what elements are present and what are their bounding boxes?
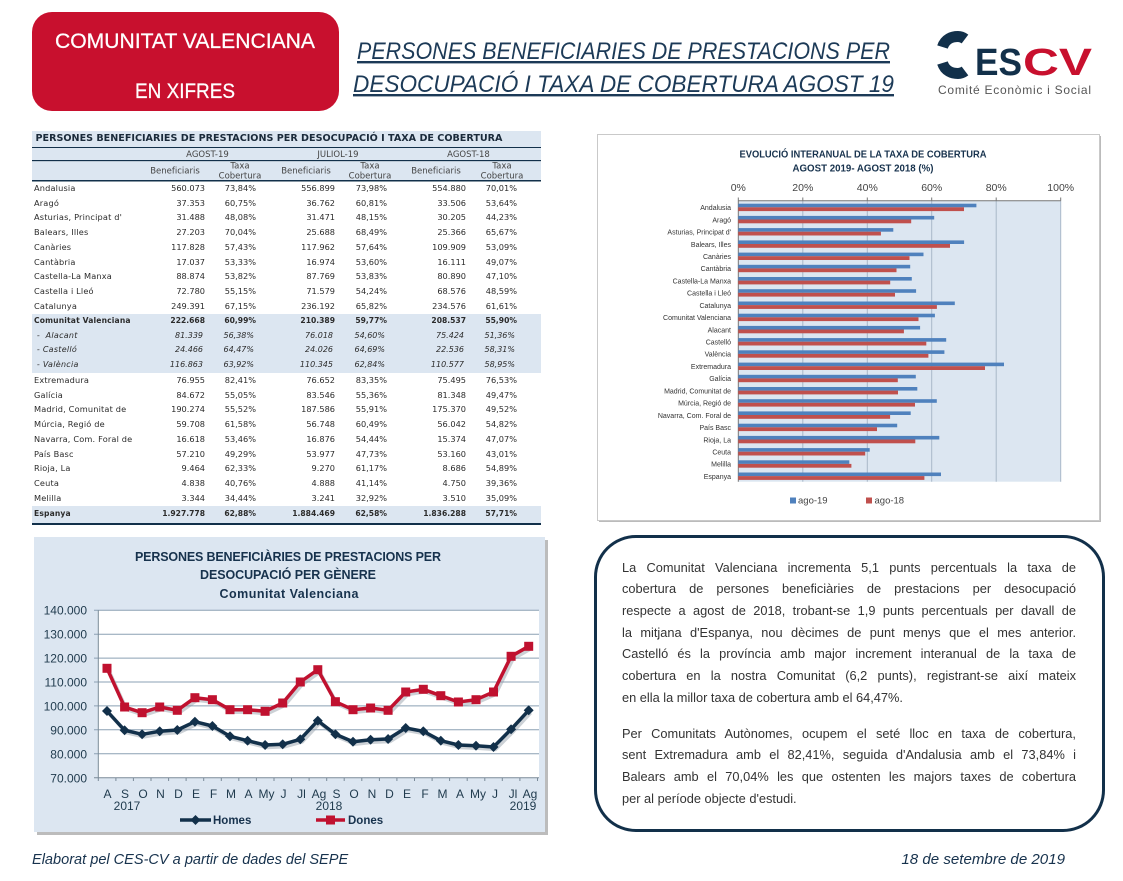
month labels: N: [368, 787, 376, 801]
data table: beneficiaries and coverage rate by region: 208.537: [431, 316, 466, 325]
data table: beneficiaries and coverage rate by region: País Basc: [34, 449, 74, 459]
region labels: Canàries: [703, 254, 731, 261]
data table: beneficiaries and coverage rate by region: 54,44%: [356, 434, 387, 444]
data table: beneficiaries and coverage rate by region: 53.977: [306, 449, 335, 459]
table column headers: [32, 148, 541, 182]
region labels: Rioja, La: [703, 437, 731, 444]
line shadows: [109, 649, 531, 750]
data table: beneficiaries and coverage rate by region: 72.780: [176, 286, 205, 296]
data table: beneficiaries and coverage rate by region: 117.962: [301, 242, 335, 252]
data table: beneficiaries and coverage rate by region: 60,75%: [225, 198, 256, 208]
data table: beneficiaries and coverage rate by region: 9.464: [182, 463, 205, 473]
data table: beneficiaries and coverage rate by region: 36.762: [306, 198, 335, 208]
data table: beneficiaries and coverage rate by region: 53,33%: [225, 257, 256, 267]
data table: beneficiaries and coverage rate by region: 49,52%: [486, 404, 517, 414]
data table: beneficiaries and coverage rate by region: 249.391: [171, 301, 205, 311]
commentary paragraph 2: Per Comunitats Autònomes, ocupem el seté lloc en taxa de cobertura,: [622, 726, 1076, 740]
data table: beneficiaries and coverage rate by region: 76,53%: [486, 375, 517, 385]
region labels: Galícia: [709, 376, 731, 383]
data table: beneficiaries and coverage rate by region: 109.909: [432, 242, 466, 252]
region labels: Madrid, Comunitat de: [664, 388, 731, 395]
data table: beneficiaries and coverage rate by region: 83.546: [306, 390, 335, 400]
bar chart legend: [790, 496, 904, 506]
table column headers: Cobertura: [219, 172, 261, 182]
data table: beneficiaries and coverage rate by region: 80.890: [437, 271, 466, 281]
data table: beneficiaries and coverage rate by region: [32, 183, 541, 525]
commentary paragraph 1: Castelló és la província amb major increment interanual de la taxa de: [622, 646, 1076, 661]
line chart title: PERSONES BENEFICIÀRIES DE PRESTACIONS PER: [135, 549, 441, 564]
header badge: Comunitat Valenciana en xifres: EN XIFRES: [135, 80, 235, 103]
data table: beneficiaries and coverage rate by region: 55,05%: [225, 390, 256, 400]
data table: beneficiaries and coverage rate by region: 187.586: [301, 404, 335, 414]
data table: beneficiaries and coverage rate by region: 68,49%: [356, 227, 387, 237]
data table: beneficiaries and coverage rate by region: 55,91%: [356, 404, 387, 414]
region labels: Ceuta: [712, 450, 731, 456]
percent axis labels: 100%: [1047, 182, 1074, 194]
line chart legend: [180, 815, 383, 827]
line chart title: DESOCUPACIÓ PER GÈNERE: [200, 567, 376, 582]
data table: beneficiaries and coverage rate by region: 9.270: [312, 463, 335, 473]
data table: beneficiaries and coverage rate by region: 59,77%: [355, 316, 387, 325]
month labels: J: [280, 787, 286, 801]
data table: beneficiaries and coverage rate by region: 190.274: [171, 404, 205, 414]
data table: beneficiaries and coverage rate by region: 31.471: [306, 212, 335, 222]
data table: beneficiaries and coverage rate by region: Asturias, Principat d': [34, 212, 122, 222]
data table: beneficiaries and coverage rate by region: 55,90%: [485, 316, 517, 325]
data table: beneficiaries and coverage rate by region: 53,64%: [486, 198, 517, 208]
data table: beneficiaries and coverage rate by region: 75.424: [436, 331, 464, 340]
table column headers: Beneficiaris: [281, 166, 331, 176]
data table: beneficiaries and coverage rate by region: 55,36%: [356, 390, 387, 400]
data table: beneficiaries and coverage rate by region: 24.466: [175, 345, 203, 354]
data table: beneficiaries and coverage rate by region: Múrcia, Regió de: [34, 419, 105, 429]
data table: beneficiaries and coverage rate by region: 16.974: [306, 257, 335, 267]
data table: beneficiaries and coverage rate by region: 62,33%: [225, 463, 256, 473]
data table: beneficiaries and coverage rate by region: 88.874: [176, 271, 205, 281]
month labels: Ag: [312, 787, 326, 801]
month labels: O: [138, 787, 148, 801]
data table: beneficiaries and coverage rate by region: Aragó: [34, 198, 59, 208]
data table: beneficiaries and coverage rate by region: 70,04%: [225, 227, 256, 237]
y axis labels: 130.000: [44, 628, 87, 642]
data table: beneficiaries and coverage rate by region: Castella-La Manxa: [34, 271, 112, 281]
data table: beneficiaries and coverage rate by region: 54,82%: [486, 419, 517, 429]
data table: beneficiaries and coverage rate by region: 48,15%: [356, 212, 387, 222]
percent axis labels: 40%: [857, 182, 878, 194]
commentary paragraph 2: sent Extremadura amb el 82,41%, seguida d'Andalusia amb el 73,84% i: [622, 747, 1076, 762]
data table: beneficiaries and coverage rate by region: 53,46%: [225, 434, 256, 444]
data table: beneficiaries and coverage rate by region: 47,10%: [486, 271, 517, 281]
data table: beneficiaries and coverage rate by region: Navarra, Com. Foral de: [34, 434, 132, 444]
table title band: [32, 131, 541, 148]
data table: beneficiaries and coverage rate by region: Comunitat Valenciana: [34, 316, 131, 325]
data table: beneficiaries and coverage rate by region: 54,24%: [356, 286, 387, 296]
table column headers: Cobertura: [481, 172, 523, 182]
panel: bar chart of coverage rate, Aug 2019 vs Aug 2018: [597, 134, 1101, 522]
data table: beneficiaries and coverage rate by region: 116.863: [170, 360, 203, 369]
month labels: A: [103, 787, 112, 801]
month labels: Jl: [297, 787, 306, 801]
table column headers: JULIOL-19: [316, 150, 359, 160]
data table: beneficiaries and coverage rate by region: 37.353: [176, 198, 205, 208]
data table: beneficiaries and coverage rate by region: Castella i Lleó: [34, 286, 94, 296]
y axis labels: 90.000: [50, 724, 87, 738]
data table: beneficiaries and coverage rate by region: 16.618: [176, 434, 205, 444]
data table: beneficiaries and coverage rate by region: Melilla: [34, 493, 61, 503]
data table: beneficiaries and coverage rate by region: Ceuta: [34, 478, 59, 488]
data table: beneficiaries and coverage rate by region: 3.344: [182, 493, 205, 503]
region labels: Cantàbria: [701, 266, 731, 273]
percent axis labels: 20%: [792, 182, 813, 194]
region labels: Andalusia: [700, 205, 731, 212]
percent axis labels: [731, 182, 1074, 194]
data table: beneficiaries and coverage rate by region: 76.018: [305, 331, 333, 340]
data table: beneficiaries and coverage rate by region: 33.506: [437, 198, 466, 208]
percent axis labels: 0%: [731, 182, 746, 194]
data table: beneficiaries and coverage rate by region: 4.838: [182, 478, 205, 488]
data table: beneficiaries and coverage rate by region: 57,43%: [225, 242, 256, 252]
table column headers: Beneficiaris: [411, 166, 461, 176]
data table: beneficiaries and coverage rate by region: 76.955: [176, 375, 205, 385]
region labels: Castelló: [706, 340, 731, 346]
region labels: Catalunya: [699, 303, 731, 310]
region labels: Balears, Illes: [691, 242, 731, 249]
month labels: O: [349, 787, 359, 801]
data table: beneficiaries and coverage rate by region: 57,64%: [356, 242, 387, 252]
data table: beneficiaries and coverage rate by region: 556.899: [301, 183, 335, 193]
commentary paragraph 1: [622, 560, 1076, 705]
data table: beneficiaries and coverage rate by region: 117.828: [171, 242, 205, 252]
commentary paragraph 2: [622, 726, 1076, 806]
bars ago-19: [738, 204, 1004, 476]
data table: beneficiaries and coverage rate by region: 554.880: [432, 183, 466, 193]
data table: beneficiaries and coverage rate by region: 82,41%: [225, 375, 256, 385]
header badge: Comunitat Valenciana en xifres: [32, 12, 339, 111]
data table: beneficiaries and coverage rate by region: Espanya: [34, 509, 71, 518]
data table: beneficiaries and coverage rate by region: - València: [37, 360, 79, 369]
data table: beneficiaries and coverage rate by region: Balears, Illes: [34, 227, 88, 237]
y axis labels: 100.000: [44, 700, 87, 714]
data table: beneficiaries and coverage rate by region: 222.668: [170, 316, 205, 325]
data table: beneficiaries and coverage rate by region: 34,44%: [225, 493, 256, 503]
plot area and gridlines: [94, 610, 539, 781]
region labels: País Basc: [699, 425, 731, 432]
data table: beneficiaries and coverage rate by region: 53,60%: [356, 257, 387, 267]
month labels: My: [470, 787, 486, 801]
region labels: Navarra, Com. Foral de: [658, 413, 731, 420]
commentary paragraph 1: cobertura de persones beneficiàries de prestacions per desocupació: [622, 581, 1076, 596]
table title band: PERSONES BENEFICIARIES DE PRESTACIONS PER DESOCUPACIÓ I TAXA DE COBERTURA: [36, 133, 502, 144]
data table: beneficiaries and coverage rate by region: 61,58%: [225, 419, 256, 429]
data table: beneficiaries and coverage rate by region: 48,59%: [486, 286, 517, 296]
data table: beneficiaries and coverage rate by region: 17.037: [176, 257, 205, 267]
region labels: Extremadura: [691, 364, 731, 371]
month labels: F: [421, 787, 429, 801]
panel: line chart of beneficiaries by gender: [34, 537, 548, 835]
bars ago-18: [738, 207, 985, 480]
data table: beneficiaries and coverage rate by region: 15.374: [437, 434, 466, 444]
month labels: Ag: [523, 787, 537, 801]
data table: beneficiaries and coverage rate by region: 83,35%: [356, 375, 387, 385]
data table: beneficiaries and coverage rate by region: 60,49%: [356, 419, 387, 429]
commentary paragraph 1: cobertura en la nostra Comunitat (6,2 punts), registrant-se així mateix: [622, 668, 1076, 683]
data table: beneficiaries and coverage rate by region: 55,15%: [225, 286, 256, 296]
month labels: E: [403, 787, 411, 801]
table column headers: Taxa: [491, 162, 512, 172]
month labels: A: [456, 787, 464, 801]
region labels: Castella i Lleó: [687, 291, 731, 298]
region labels: Alacant: [708, 327, 731, 334]
data table: beneficiaries and coverage rate by region: 61,17%: [356, 463, 387, 473]
data table: beneficiaries and coverage rate by region: 40,76%: [225, 478, 256, 488]
month labels: S: [121, 787, 129, 801]
data table: beneficiaries and coverage rate by region: 110.345: [300, 360, 333, 369]
logo: CES CV: [937, 31, 1093, 97]
y axis labels: 110.000: [44, 676, 87, 690]
data table: beneficiaries and coverage rate by region: 55,52%: [225, 404, 256, 414]
region labels: València: [705, 352, 731, 359]
data table: beneficiaries and coverage rate by region: 1.927.778: [162, 509, 205, 518]
y axis labels: [44, 604, 87, 786]
bar chart legend: ago-18: [874, 496, 904, 506]
commentary paragraph 2: per al període objecte d'estudi.: [622, 791, 797, 806]
month labels: F: [210, 787, 217, 801]
table column headers: AGOST-19: [186, 150, 229, 160]
data table: beneficiaries and coverage rate by region: 175.370: [432, 404, 466, 414]
data table: beneficiaries and coverage rate by region: 44,23%: [486, 212, 517, 222]
data table: beneficiaries and coverage rate by region: 560.073: [171, 183, 205, 193]
month labels: J: [492, 787, 498, 801]
data table: beneficiaries and coverage rate by region: - Castelló: [37, 345, 77, 354]
header badge: Comunitat Valenciana en xifres: COMUNITAT VALENCIANA: [55, 30, 315, 53]
data table: beneficiaries and coverage rate by region: 62,84%: [354, 360, 385, 369]
footer: source: Elaborat pel CES-CV a partir de dades del SEPE: [32, 852, 348, 868]
logo: CES CV: ES: [975, 42, 1022, 84]
y axis labels: 120.000: [44, 652, 87, 666]
title: [353, 38, 894, 98]
data table: beneficiaries and coverage rate by region: 63,92%: [223, 360, 254, 369]
percent axis labels: 60%: [921, 182, 942, 194]
month labels: D: [174, 787, 183, 801]
data table: beneficiaries and coverage rate by region: Galícia: [34, 390, 63, 400]
data table: beneficiaries and coverage rate by region: 60,99%: [224, 316, 256, 325]
y axis labels: 140.000: [44, 604, 87, 618]
month labels: N: [156, 787, 165, 801]
line chart legend: Dones: [348, 815, 383, 827]
data table: beneficiaries and coverage rate by region: 61,61%: [486, 301, 517, 311]
data table: beneficiaries and coverage rate by region: 110.577: [431, 360, 464, 369]
data table: beneficiaries and coverage rate by region: 49,07%: [486, 257, 517, 267]
data table: beneficiaries and coverage rate by region: 24.026: [305, 345, 333, 354]
data table: beneficiaries and coverage rate by region: Cantàbria: [34, 257, 76, 267]
data table: beneficiaries and coverage rate by region: 53,82%: [225, 271, 256, 281]
commentary paragraph 2: Balears amb el 70,04% les que ostenten les majors taxes de cobertura: [622, 769, 1076, 784]
region labels: Castella-La Manxa: [673, 278, 731, 285]
line chart legend: Homes: [213, 815, 251, 827]
table column headers: Beneficiaris: [150, 166, 200, 176]
data table: beneficiaries and coverage rate by region: 62,88%: [224, 509, 256, 518]
table column headers: AGOST-18: [447, 150, 490, 160]
region labels: Múrcia, Regió de: [678, 401, 731, 408]
month labels: M: [226, 787, 236, 801]
month labels: My: [258, 787, 274, 801]
data table: beneficiaries and coverage rate by region: 56.042: [437, 419, 466, 429]
data table: beneficiaries and coverage rate by region: 49,29%: [225, 449, 256, 459]
commentary paragraph 1: La Comunitat Valenciana incrementa 5,1 punts percentuals la taxa de: [622, 560, 1076, 574]
data table: beneficiaries and coverage rate by region: 53,09%: [486, 242, 517, 252]
data table: beneficiaries and coverage rate by region: 53.160: [437, 449, 466, 459]
bar chart title: EVOLUCIÓ INTERANUAL DE LA TAXA DE COBERTURA: [740, 148, 987, 160]
commentary paragraph 1: la mitjana d'Espanya, nou dècimes de punt menys que el mes anterior.: [622, 625, 1076, 640]
data table: beneficiaries and coverage rate by region: 57,71%: [485, 509, 517, 518]
panel: commentary text: [594, 535, 1105, 832]
data table: beneficiaries and coverage rate by region: 234.576: [432, 301, 466, 311]
data table: beneficiaries and coverage rate by region: 87.769: [306, 271, 335, 281]
data table: beneficiaries and coverage rate by region: 25.366: [437, 227, 466, 237]
data table: beneficiaries and coverage rate by region: 84.672: [176, 390, 205, 400]
data table: beneficiaries and coverage rate by region: 41,14%: [356, 478, 387, 488]
logo: CES CV: Comité Econòmic i Social: [938, 83, 1091, 97]
data table: beneficiaries and coverage rate by region: 65,67%: [486, 227, 517, 237]
table column headers: Taxa: [229, 162, 250, 172]
logo: CES CV: CV: [1023, 42, 1093, 84]
month labels: 2018: [316, 799, 343, 813]
data table: beneficiaries and coverage rate by region: 47,07%: [486, 434, 517, 444]
data table: beneficiaries and coverage rate by region: Canàries: [34, 242, 71, 252]
percent axis labels: 80%: [986, 182, 1007, 194]
data table: beneficiaries and coverage rate by region: 81.348: [437, 390, 466, 400]
data table: beneficiaries and coverage rate by region: Madrid, Comunitat de: [34, 404, 126, 414]
data table: beneficiaries and coverage rate by region: 210.389: [300, 316, 335, 325]
data table: beneficiaries and coverage rate by region: 64,47%: [223, 345, 254, 354]
data table: beneficiaries and coverage rate by region: 30.205: [437, 212, 466, 222]
data table: beneficiaries and coverage rate by region: Extremadura: [34, 375, 89, 385]
y axis labels: 70.000: [50, 772, 87, 786]
commentary paragraph 1: respecte a agost de 2018, trobant-se 1,9 punts percentuals per davall de: [622, 603, 1076, 618]
data table: beneficiaries and coverage rate by region: 49,47%: [486, 390, 517, 400]
data table: beneficiaries and coverage rate by region: 236.192: [301, 301, 335, 311]
data table: beneficiaries and coverage rate by region: 47,73%: [356, 449, 387, 459]
data table: beneficiaries and coverage rate by region: 1.884.469: [292, 509, 335, 518]
y axis labels: 80.000: [50, 748, 87, 762]
data table: beneficiaries and coverage rate by region: 54,60%: [354, 331, 385, 340]
region labels: Espanya: [704, 474, 731, 481]
data table: beneficiaries and coverage rate by region: 76.652: [306, 375, 335, 385]
month labels: E: [192, 787, 200, 801]
data table: beneficiaries and coverage rate by region: 43,01%: [486, 449, 517, 459]
data table: beneficiaries and coverage rate by region: 4.888: [312, 478, 335, 488]
month labels: 2017: [114, 799, 141, 813]
data table: beneficiaries and coverage rate by region: 3.510: [443, 493, 466, 503]
table column headers: Taxa: [359, 162, 380, 172]
commentary paragraph 1: en ella la millor taxa de cobertura amb el 64,47%.: [622, 690, 903, 705]
data table: beneficiaries and coverage rate by region: 73,84%: [225, 183, 256, 193]
line: Homes: [107, 710, 529, 747]
data table: beneficiaries and coverage rate by region: 68.576: [437, 286, 466, 296]
data table: beneficiaries and coverage rate by region: Rioja, La: [34, 463, 71, 473]
bar chart title: [740, 148, 987, 174]
data table: beneficiaries and coverage rate by region: 16.111: [437, 257, 466, 267]
data table: beneficiaries and coverage rate by region: 3.241: [312, 493, 335, 503]
month labels: M: [438, 787, 448, 801]
bar chart title: AGOST 2019- AGOST 2018 (%): [792, 162, 934, 174]
data table: beneficiaries and coverage rate by region: 22.536: [436, 345, 464, 354]
data table: beneficiaries and coverage rate by region: Andalusia: [34, 183, 76, 193]
region labels: Asturias, Principat d': [667, 230, 731, 236]
data table: beneficiaries and coverage rate by region: 32,92%: [356, 493, 387, 503]
month labels: A: [244, 787, 253, 801]
data table: beneficiaries and coverage rate by region: 31.488: [176, 212, 205, 222]
region labels: Aragó: [712, 217, 731, 224]
data table: beneficiaries and coverage rate by region: 39,36%: [486, 478, 517, 488]
data table: beneficiaries and coverage rate by region: 64,69%: [354, 345, 385, 354]
line chart title: Comunitat Valenciana: [220, 587, 360, 601]
data table: beneficiaries and coverage rate by region: 53,83%: [356, 271, 387, 281]
data table: beneficiaries and coverage rate by region: 67,15%: [225, 301, 256, 311]
data table: beneficiaries and coverage rate by region: 35,09%: [486, 493, 517, 503]
bar chart legend: ago-19: [798, 496, 828, 506]
line: Dones: [107, 646, 529, 713]
data table: beneficiaries and coverage rate by region: 58,95%: [484, 360, 515, 369]
plot area and gridlines: [738, 198, 1061, 482]
footer: date: 18 de setembre de 2019: [901, 851, 1065, 868]
data table: beneficiaries and coverage rate by region: 56.748: [306, 419, 335, 429]
data table: beneficiaries and coverage rate by region: 25.688: [306, 227, 335, 237]
data table: beneficiaries and coverage rate by region: 58,31%: [484, 345, 515, 354]
data table: beneficiaries and coverage rate by region: 54,89%: [486, 463, 517, 473]
data table: beneficiaries and coverage rate by region: 51,36%: [484, 331, 515, 340]
data table: beneficiaries and coverage rate by region: 56,38%: [223, 331, 254, 340]
data table: beneficiaries and coverage rate by region: 70,01%: [486, 183, 517, 193]
region labels: Melilla: [711, 462, 731, 469]
data table: beneficiaries and coverage rate by region: 65,82%: [356, 301, 387, 311]
data table: beneficiaries and coverage rate by region: - Alacant: [37, 331, 78, 340]
data table: beneficiaries and coverage rate by region: 48,08%: [225, 212, 256, 222]
data table: beneficiaries and coverage rate by region: 57.210: [176, 449, 205, 459]
month labels: Jl: [509, 787, 517, 801]
data table: beneficiaries and coverage rate by region: 16.876: [306, 434, 335, 444]
month labels: [103, 787, 537, 813]
month labels: S: [332, 787, 341, 801]
data table: beneficiaries and coverage rate by region: 8.686: [443, 463, 466, 473]
region labels: Comunitat Valenciana: [663, 315, 731, 322]
data table: beneficiaries and coverage rate by region: 1.836.288: [423, 509, 466, 518]
data table: beneficiaries and coverage rate by region: 73,98%: [356, 183, 387, 193]
data table: beneficiaries and coverage rate by region: 81.339: [175, 331, 203, 340]
data table: beneficiaries and coverage rate by region: 27.203: [176, 227, 205, 237]
data table: beneficiaries and coverage rate by region: Catalunya: [34, 301, 77, 311]
data table: beneficiaries and coverage rate by region: 59.708: [176, 419, 205, 429]
line chart title: [135, 549, 441, 601]
region labels: [658, 205, 731, 481]
data table: beneficiaries and coverage rate by region: 62,58%: [355, 509, 387, 518]
data table: beneficiaries and coverage rate by region: 71.579: [306, 286, 335, 296]
data table: beneficiaries and coverage rate by region: 60,81%: [356, 198, 387, 208]
table column headers: Cobertura: [349, 172, 391, 182]
month labels: 2019: [510, 799, 537, 813]
data table: beneficiaries and coverage rate by region: 75.495: [437, 375, 466, 385]
data table: beneficiaries and coverage rate by region: 4.750: [443, 478, 466, 488]
month labels: D: [385, 787, 394, 801]
